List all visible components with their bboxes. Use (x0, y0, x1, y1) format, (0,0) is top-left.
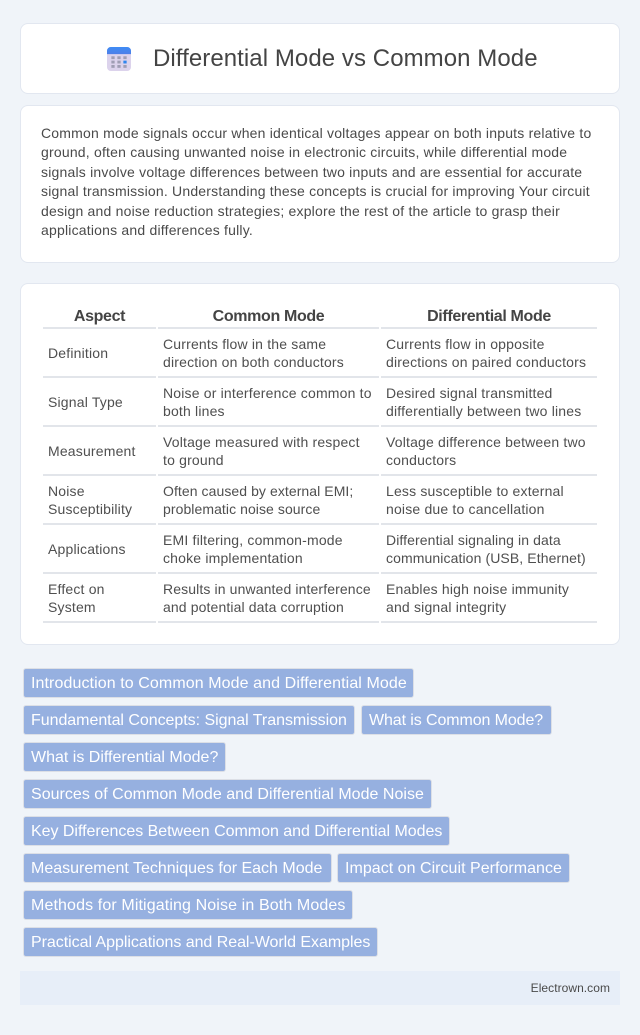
panel: comparison table: Voltage difference between two (386, 434, 586, 450)
intro paragraph: signal transmission. Understanding these concepts is crucial for improving Your circuit (41, 183, 590, 199)
intro paragraph: design and noise reduction strategies; explore the rest of the article to grasp their (41, 203, 560, 219)
tag: Fundamental Concepts: Signal Transmission (31, 712, 347, 729)
tag (23, 890, 353, 920)
panel: comparison table: direction on both conductors (163, 354, 344, 370)
row: Definition: Definition (48, 345, 108, 361)
table header: Common Mode: Common Mode (213, 308, 324, 325)
panel: comparison table: EMI filtering, common-mode (163, 532, 343, 548)
panel: comparison table: Desired signal transmitted (386, 385, 553, 401)
row: Effect on System: Effect on (48, 581, 105, 597)
row: Effect on System (48, 581, 105, 615)
title: Differential Mode vs Common Mode (153, 45, 538, 72)
header card (20, 23, 620, 94)
tag: Key Differences Between Common and Differential Modes (31, 823, 442, 840)
panel: comparison table: and potential data corruption (163, 599, 344, 615)
panel: comparison table: choke implementation (163, 550, 303, 566)
panel: comparison table: Often caused by external EMI; (163, 483, 353, 499)
tag: What is Differential Mode? (31, 749, 218, 766)
panel: comparison table: Voltage measured with respect (163, 434, 360, 450)
tag (23, 668, 414, 698)
intro paragraph: signals involve voltage differences between two inputs and are essential for accurate (41, 164, 582, 180)
footer credit: Electrown.com (531, 981, 610, 995)
intro paragraph: ground, often causing unwanted noise in electronic circuits, while differential mode (41, 144, 567, 160)
intro paragraph: applications and differences fully. (41, 222, 253, 238)
panel: comparison table: Differential signaling in data (386, 532, 561, 548)
tag: Impact on Circuit Performance (345, 860, 562, 877)
panel: comparison table: to ground (163, 452, 224, 468)
footer (20, 971, 620, 1005)
tag (23, 779, 432, 809)
row: Signal Type: Signal Type (48, 394, 123, 410)
row: Effect on System: System (48, 599, 96, 615)
tag (23, 927, 378, 957)
tag: Measurement Techniques for Each Mode (31, 860, 322, 877)
tag (361, 705, 552, 735)
tag: Introduction to Common Mode and Differential Mode (31, 675, 407, 692)
panel: comparison table: Enables high noise immunity (386, 581, 569, 597)
tag (23, 705, 355, 735)
icon: calendar (107, 47, 131, 71)
panel: comparison table (20, 283, 620, 645)
row: Noise Susceptibility (48, 483, 132, 517)
panel: comparison table: problematic noise source (163, 501, 320, 517)
intro paragraph: Common mode signals occur when identical voltages appear on both inputs relative to (41, 124, 591, 140)
panel: comparison table: differentially between two lines (386, 403, 581, 419)
tag (337, 853, 570, 883)
tag (23, 742, 226, 772)
tag list: article sections (23, 668, 570, 957)
panel: comparison table: Results in unwanted interference (163, 581, 371, 597)
tag: Practical Applications and Real-World Examples (31, 934, 370, 951)
panel: comparison table: both lines (163, 403, 225, 419)
row: Noise Susceptibility: Susceptibility (48, 501, 132, 517)
panel: comparison table: and signal integrity (386, 599, 506, 615)
tag: Sources of Common Mode and Differential Mode Noise (31, 786, 424, 803)
panel: comparison table: Noise or interference common to (163, 385, 372, 401)
panel: intro text (20, 105, 620, 263)
table header: Differential Mode: Differential Mode (427, 308, 551, 325)
panel: comparison table: Less susceptible to external (386, 483, 564, 499)
intro paragraph (41, 124, 591, 238)
tag: Methods for Mitigating Noise in Both Modes (31, 897, 346, 914)
panel: comparison table: Currents flow in opposite (386, 336, 545, 352)
row: Noise Susceptibility: Noise (48, 483, 85, 499)
panel: comparison table: Currents flow in the same (163, 336, 326, 352)
panel: comparison table: noise due to cancellation (386, 501, 545, 517)
tag (23, 853, 332, 883)
panel: comparison table: conductors (386, 452, 456, 468)
tag: What is Common Mode? (369, 712, 543, 729)
tag (23, 816, 450, 846)
panel: comparison table: communication (USB, Ethernet) (386, 550, 586, 566)
row: Measurement: Measurement (48, 443, 136, 459)
panel: comparison table: directions on paired conductors (386, 354, 586, 370)
table header: Aspect: Aspect (74, 308, 125, 325)
row: Applications: Applications (48, 541, 126, 557)
